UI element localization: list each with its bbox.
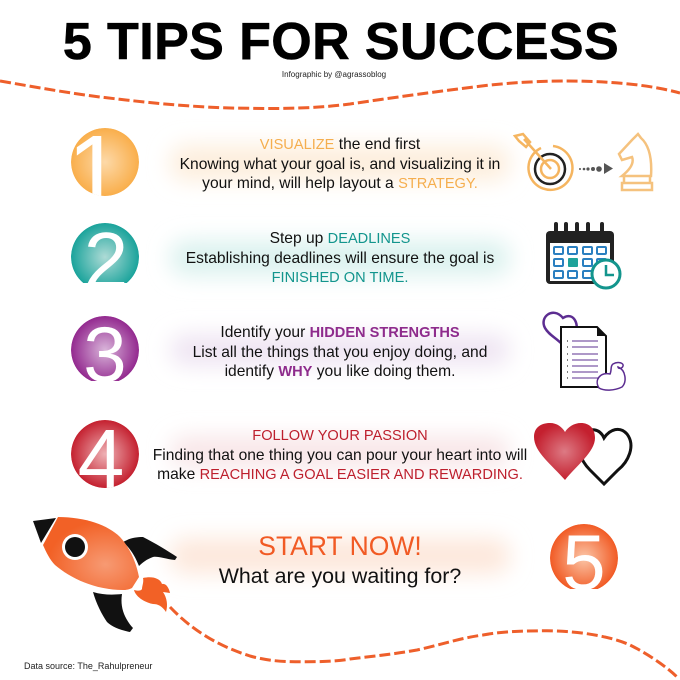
number badge 2: 2 bbox=[84, 216, 128, 305]
number badge 4: 4 bbox=[78, 412, 124, 506]
tip 3 text: Identify your HIDDEN STRENGTHS bbox=[220, 324, 460, 341]
icon: rocket bbox=[33, 517, 177, 632]
title: 5 TIPS FOR SUCCESS bbox=[63, 13, 619, 71]
tip 2 text: Establishing deadlines will ensure the goal is bbox=[186, 250, 494, 267]
start now callout: What are you waiting for? bbox=[219, 564, 461, 588]
tip 4 text: Finding that one thing you can pour your heart into will bbox=[153, 447, 527, 464]
number badge 5 bbox=[550, 524, 618, 589]
bottom dashed path bbox=[170, 607, 677, 677]
tip 1 text: Knowing what your goal is, and visualizing it in bbox=[180, 156, 500, 173]
data source: Data source: The_Rahulpreneur bbox=[24, 661, 152, 671]
number badge 4 bbox=[71, 420, 139, 488]
top dashed path bbox=[0, 81, 680, 109]
tip 1 text: VISUALIZE the end first bbox=[260, 136, 420, 153]
tip 4 text: FOLLOW YOUR PASSION bbox=[252, 428, 428, 444]
tip 3 text: List all the things that you enjoy doing, and bbox=[193, 344, 487, 361]
start now callout bbox=[218, 531, 461, 588]
icon: target and knight bbox=[515, 134, 652, 190]
number badge 5: 5 bbox=[562, 518, 606, 606]
byline: Infographic by @agrassoblog bbox=[282, 70, 386, 79]
start now callout: START NOW! bbox=[258, 531, 422, 561]
tip 2 text: FINISHED ON TIME. bbox=[272, 270, 408, 286]
tip 2 text: Step up DEADLINES bbox=[270, 230, 410, 247]
glow bands bbox=[170, 145, 510, 574]
number badge 3: 3 bbox=[83, 310, 127, 398]
tip 2 text bbox=[186, 230, 494, 286]
icon: document with heart and muscle bbox=[544, 313, 625, 390]
icon: two hearts bbox=[534, 423, 631, 484]
tip 1 text bbox=[180, 136, 500, 192]
icon: calendar with clock bbox=[546, 224, 620, 288]
number badge 1: 1 bbox=[67, 115, 123, 227]
tip 3 text: identify WHY you like doing them. bbox=[225, 363, 455, 380]
tip 1 text: your mind, will help layout a STRATEGY. bbox=[202, 175, 478, 192]
number badge 3 bbox=[71, 316, 139, 381]
tip 4 text: make REACHING A GOAL EASIER AND REWARDING. bbox=[157, 466, 523, 483]
tip 4 text bbox=[153, 428, 527, 483]
number badge 2 bbox=[71, 223, 139, 283]
tip 3 text bbox=[193, 324, 487, 380]
number badge 1 bbox=[71, 128, 139, 196]
